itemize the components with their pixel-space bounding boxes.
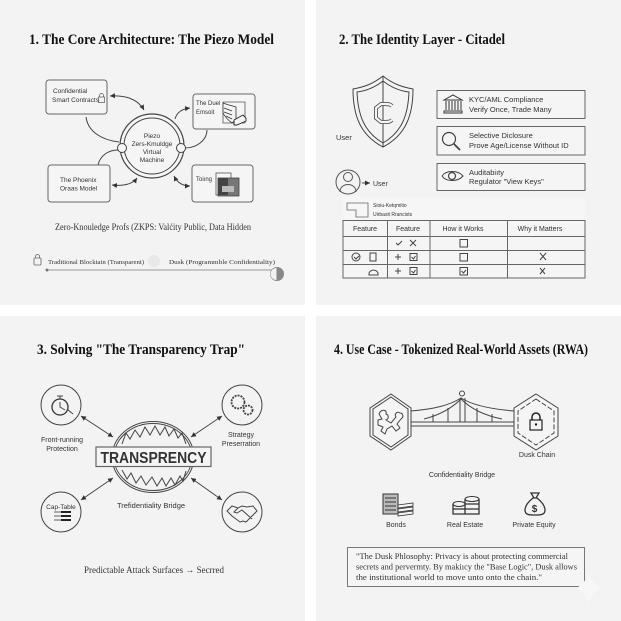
label: front-running protection: Protection — [46, 446, 78, 453]
heading: identity layer: 2. The Identity Layer - Citadel — [339, 32, 505, 48]
node: the dual circuit: The Duel — [196, 101, 220, 107]
node: confidential smart contracts: Confidential — [53, 88, 88, 95]
central transparency trap: TRANSPRENCY — [100, 450, 207, 467]
icon: money bag — [525, 493, 545, 515]
quote: dusk philosophy: secrets and pervermty. By makiıcy the "Base Logic", Dusk allows — [356, 562, 578, 572]
spoke arrows — [81, 416, 222, 500]
central transparency trap — [96, 422, 211, 492]
icon: source network hexagon — [370, 394, 411, 450]
panel: tokenized real-world assets — [316, 316, 621, 621]
card: selective disclosure: Selective Diclosure — [469, 131, 533, 140]
label: confidentiality bridge: Confidentiality Bridge — [429, 472, 495, 479]
icon: stopwatch — [41, 385, 81, 425]
icon: strategy gears — [222, 385, 262, 425]
node: tokens — [192, 165, 253, 202]
confidentiality slider: Traditional Blocktain (Transparent) — [48, 259, 144, 266]
label: strategy preservation — [222, 432, 260, 448]
central piezo virtual machine: Virtual — [143, 149, 162, 156]
icon: dusk chain hexagon with lock — [514, 394, 558, 450]
comparison table: How it Works — [442, 226, 484, 233]
icon: citadel shield — [353, 76, 413, 147]
label: front-running protection — [41, 437, 83, 453]
bridge illustration — [411, 391, 514, 426]
quote: dusk philosophy: the institutional world to move unto onto the chain." — [356, 572, 542, 582]
node: tokens: Toiıng — [196, 177, 212, 183]
label: real estate: Real Estate — [447, 522, 483, 529]
label: user: User — [336, 133, 352, 142]
label: private equity: Private Equity — [512, 522, 556, 529]
user avatar — [336, 170, 388, 194]
panel: identity layer — [316, 0, 621, 305]
quote: dusk philosophy — [348, 548, 584, 586]
central piezo virtual machine: Piezo — [144, 133, 161, 140]
label: strategy preservation: Preserration — [222, 441, 260, 448]
connector curves — [86, 96, 207, 186]
icon: handshake — [222, 492, 262, 532]
panel: transparency trap — [0, 316, 305, 621]
comparison table: Why it Matters — [518, 226, 563, 233]
central piezo virtual machine — [118, 114, 186, 178]
node: the phoenix model: The Phoenix — [60, 177, 97, 184]
label: strategy preservation: Strategy — [228, 432, 255, 439]
comparison table — [343, 220, 585, 278]
label: bonds: Bonds — [386, 522, 406, 529]
icon: real estate — [453, 496, 479, 514]
card: kyc/aml compliance: Verify Once, Trade Many — [469, 105, 552, 114]
label: dusk chain: Dusk Chain — [519, 452, 555, 459]
caption: predictable attack surfaces: Predictable Attack Surfaces → Secrred — [84, 565, 224, 576]
icon: bonds — [383, 494, 413, 516]
card: auditability: Regulator "View Keys" — [469, 177, 544, 186]
central piezo virtual machine: Machine — [140, 157, 165, 164]
legend strip — [343, 197, 585, 220]
card: kyc/aml compliance: KYC/AML Compliance — [469, 95, 543, 104]
quote: dusk philosophy: "The Dusk Phlosophy: Privacy is about protecting commercial — [356, 551, 569, 561]
sparkle mark — [577, 568, 601, 606]
node: the phoenix model: Oraas Model — [60, 186, 98, 192]
card: kyc/aml compliance — [437, 90, 585, 118]
icon: cap-table: Cap-Table — [46, 504, 76, 511]
user avatar: User — [373, 181, 388, 188]
node: the phoenix model — [48, 165, 110, 202]
caption: zero-knowledge proofs: Zero-Knouledge Profs (ZKPS: Valćity Public, Data Hidden — [55, 222, 251, 233]
heading: core architecture: 1. The Core Architecture: The Piezo Model — [29, 32, 274, 48]
node: confidential smart contracts: Smart Contracts — [52, 97, 100, 104]
comparison table: Feature — [396, 226, 420, 233]
panel: core architecture — [0, 0, 305, 305]
legend strip: Sioiu-Ketqmitio — [373, 203, 407, 209]
legend strip: Uirbasit Rrancists — [373, 212, 413, 218]
comparison table: Feature — [353, 226, 377, 233]
card: selective disclosure — [437, 126, 585, 155]
card: selective disclosure: Prove Age/License Without ID — [469, 141, 569, 150]
confidentiality slider — [34, 254, 284, 281]
node: confidential smart contracts — [46, 80, 107, 114]
icon: cap-table — [41, 492, 81, 532]
confidentiality slider: Dusk (Programmble Confidentiality) — [169, 259, 275, 266]
central piezo virtual machine: Zers-Kmuldge — [132, 141, 173, 148]
node: the dual circuit: Emsoit — [196, 110, 215, 116]
card: auditability — [437, 164, 585, 190]
label: confidentiality bridge: Trefidentiality Bridge — [117, 501, 185, 510]
card: auditability: Auditabiıty — [469, 168, 504, 177]
heading: transparency trap: 3. Solving "The Transparency Trap" — [37, 342, 245, 358]
icon: money bag: $ — [532, 504, 538, 515]
label: front-running protection: Front-running — [41, 437, 83, 444]
node: the dual circuit — [193, 94, 255, 129]
